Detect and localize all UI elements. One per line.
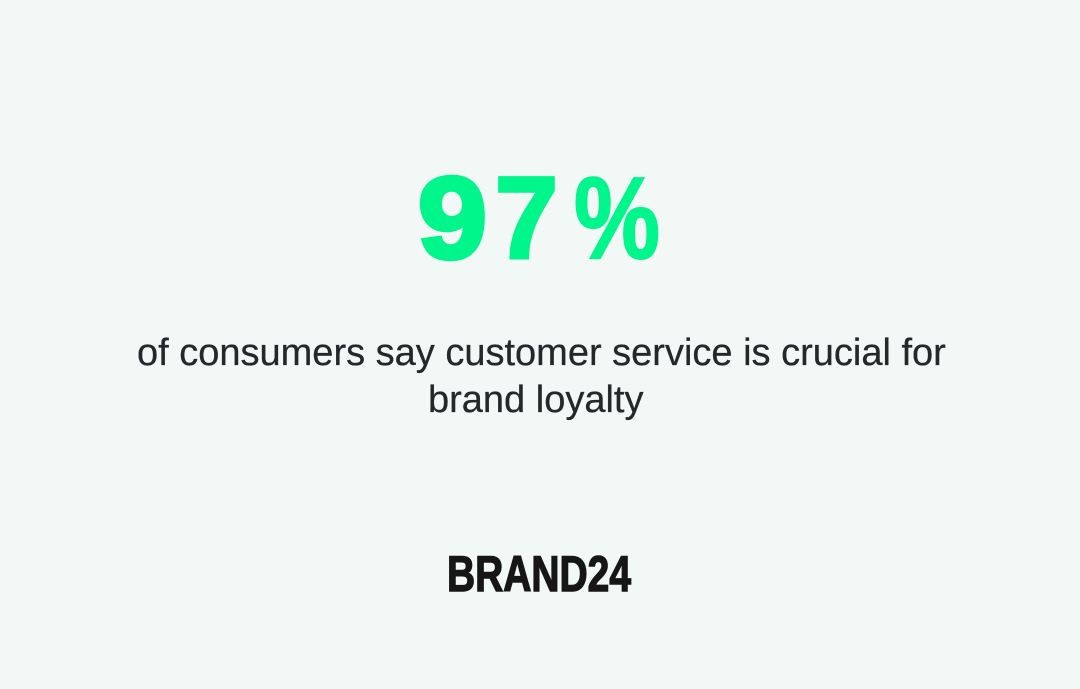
big statistic: 97%: %	[574, 153, 660, 283]
description line two: brand loyalty	[428, 379, 643, 421]
big statistic: 97%: 7	[495, 153, 558, 283]
description line one: of consumers say customer service is crucial for	[137, 332, 946, 374]
big statistic: 97%: 9	[418, 153, 487, 283]
